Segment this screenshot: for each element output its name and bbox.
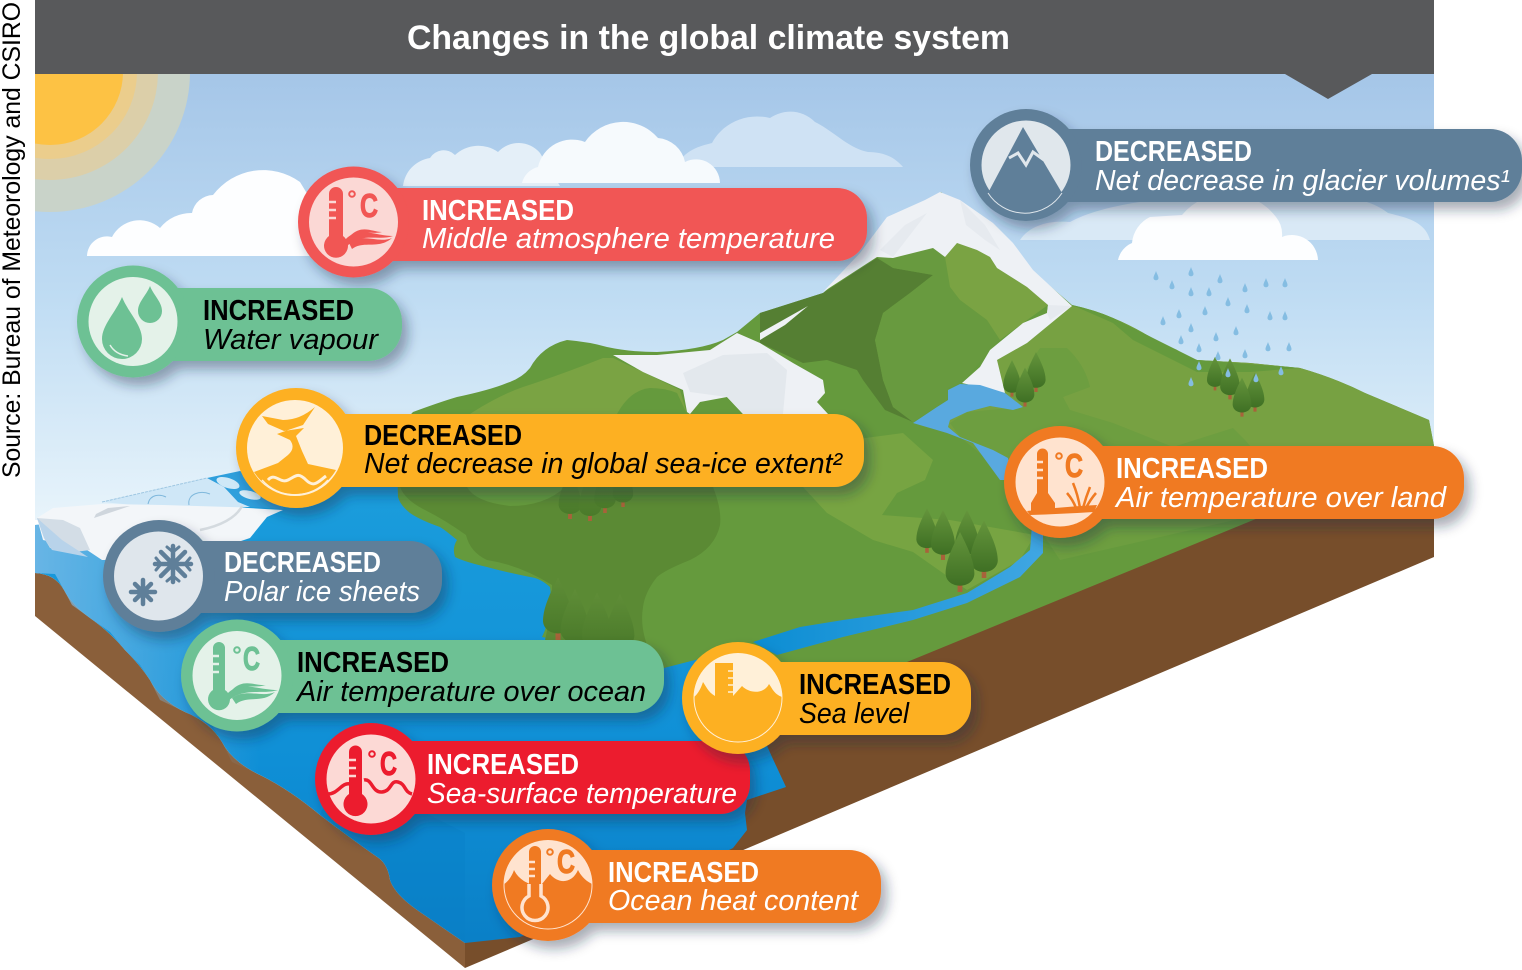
badge: sea level — [682, 642, 971, 754]
mountain light face — [945, 243, 1048, 340]
title bar — [35, 0, 1434, 99]
label: INCREASED — [427, 749, 579, 781]
icon: thermometer and wind — [208, 640, 278, 710]
icon: cracking sea ice — [254, 407, 336, 495]
label: DECREASED — [1095, 136, 1252, 168]
icon: thermometer and wind: C — [360, 187, 378, 224]
dark mountain face — [760, 258, 933, 422]
lake — [913, 384, 1023, 480]
badge: polar ice sheets — [103, 520, 442, 632]
icon: mountain — [988, 127, 1062, 213]
lower dark valley — [400, 487, 720, 645]
label: INCREASED — [799, 669, 951, 701]
badge: sea-ice extent — [236, 388, 864, 508]
mountain middle face — [875, 248, 1000, 422]
snow streak — [760, 306, 808, 340]
description: Sea level — [799, 698, 910, 730]
description: Net decrease in glacier volumes¹ — [1095, 165, 1510, 197]
icon: ocean thermometer: C — [557, 843, 575, 880]
snow patch shading — [683, 353, 787, 414]
sea ice extent — [37, 471, 284, 560]
label: INCREASED — [1116, 453, 1268, 485]
badge: glacier volumes — [970, 109, 1522, 221]
icon: thermometer and wind — [324, 187, 393, 258]
light slope band — [803, 433, 1035, 590]
snow shading — [880, 200, 1072, 320]
lower dark valley inner band — [467, 487, 565, 506]
description: Air temperature over ocean — [295, 676, 646, 708]
label: DECREASED — [364, 420, 522, 452]
sky background — [35, 74, 1434, 520]
earth block: left face — [35, 573, 465, 968]
left ridge light band — [470, 358, 687, 414]
snow cap — [823, 192, 1072, 393]
label: INCREASED — [608, 857, 759, 889]
trees — [543, 352, 1264, 655]
description: Polar ice sheets — [224, 576, 420, 608]
label: INCREASED — [422, 195, 574, 227]
icon: thermometer and waves: C — [380, 745, 397, 782]
description: Air temperature over land — [1114, 482, 1447, 514]
label: INCREASED — [203, 295, 354, 327]
icon: thermometer and grass — [1027, 447, 1097, 515]
label: DECREASED — [224, 547, 381, 579]
icon: thermometer and wind: C — [243, 640, 260, 677]
icon: sea level gauge — [694, 653, 782, 742]
right hill darker lower part — [950, 348, 1300, 560]
sun with halo — [35, 74, 190, 212]
title: Changes in the global climate system — [407, 19, 1010, 57]
icon: snowflakes — [131, 546, 191, 604]
icon: water drops — [102, 286, 162, 359]
badge: air temperature over land — [1004, 426, 1464, 538]
sea front face shade — [320, 770, 465, 943]
icon: thermometer and waves — [328, 745, 412, 816]
description: Ocean heat content — [608, 885, 860, 917]
right hill ridge rim — [1072, 305, 1300, 372]
earth block: right face — [465, 446, 1434, 968]
badge: water vapour — [77, 266, 402, 378]
sea — [35, 470, 790, 943]
badge: ocean heat content — [492, 829, 881, 941]
description: Middle atmosphere temperature — [422, 223, 835, 255]
left ridge mid hill — [617, 388, 687, 414]
icon: thermometer and grass: C — [1065, 447, 1083, 484]
icon: ocean thermometer — [504, 840, 592, 929]
badge: sea-surface temperature — [315, 723, 750, 835]
river — [753, 525, 1043, 655]
right hill — [948, 306, 1434, 520]
description: Water vapour — [203, 324, 379, 356]
badge: air temperature over ocean — [181, 620, 664, 732]
snow patch — [613, 333, 828, 414]
rain drops — [1154, 267, 1292, 386]
label: INCREASED — [297, 647, 449, 679]
description: Sea-surface temperature — [427, 778, 737, 810]
description: Net decrease in global sea-ice extent² — [364, 448, 843, 480]
clouds — [87, 112, 1430, 260]
land — [396, 192, 1434, 668]
badge: middle atmosphere temperature — [298, 166, 867, 278]
